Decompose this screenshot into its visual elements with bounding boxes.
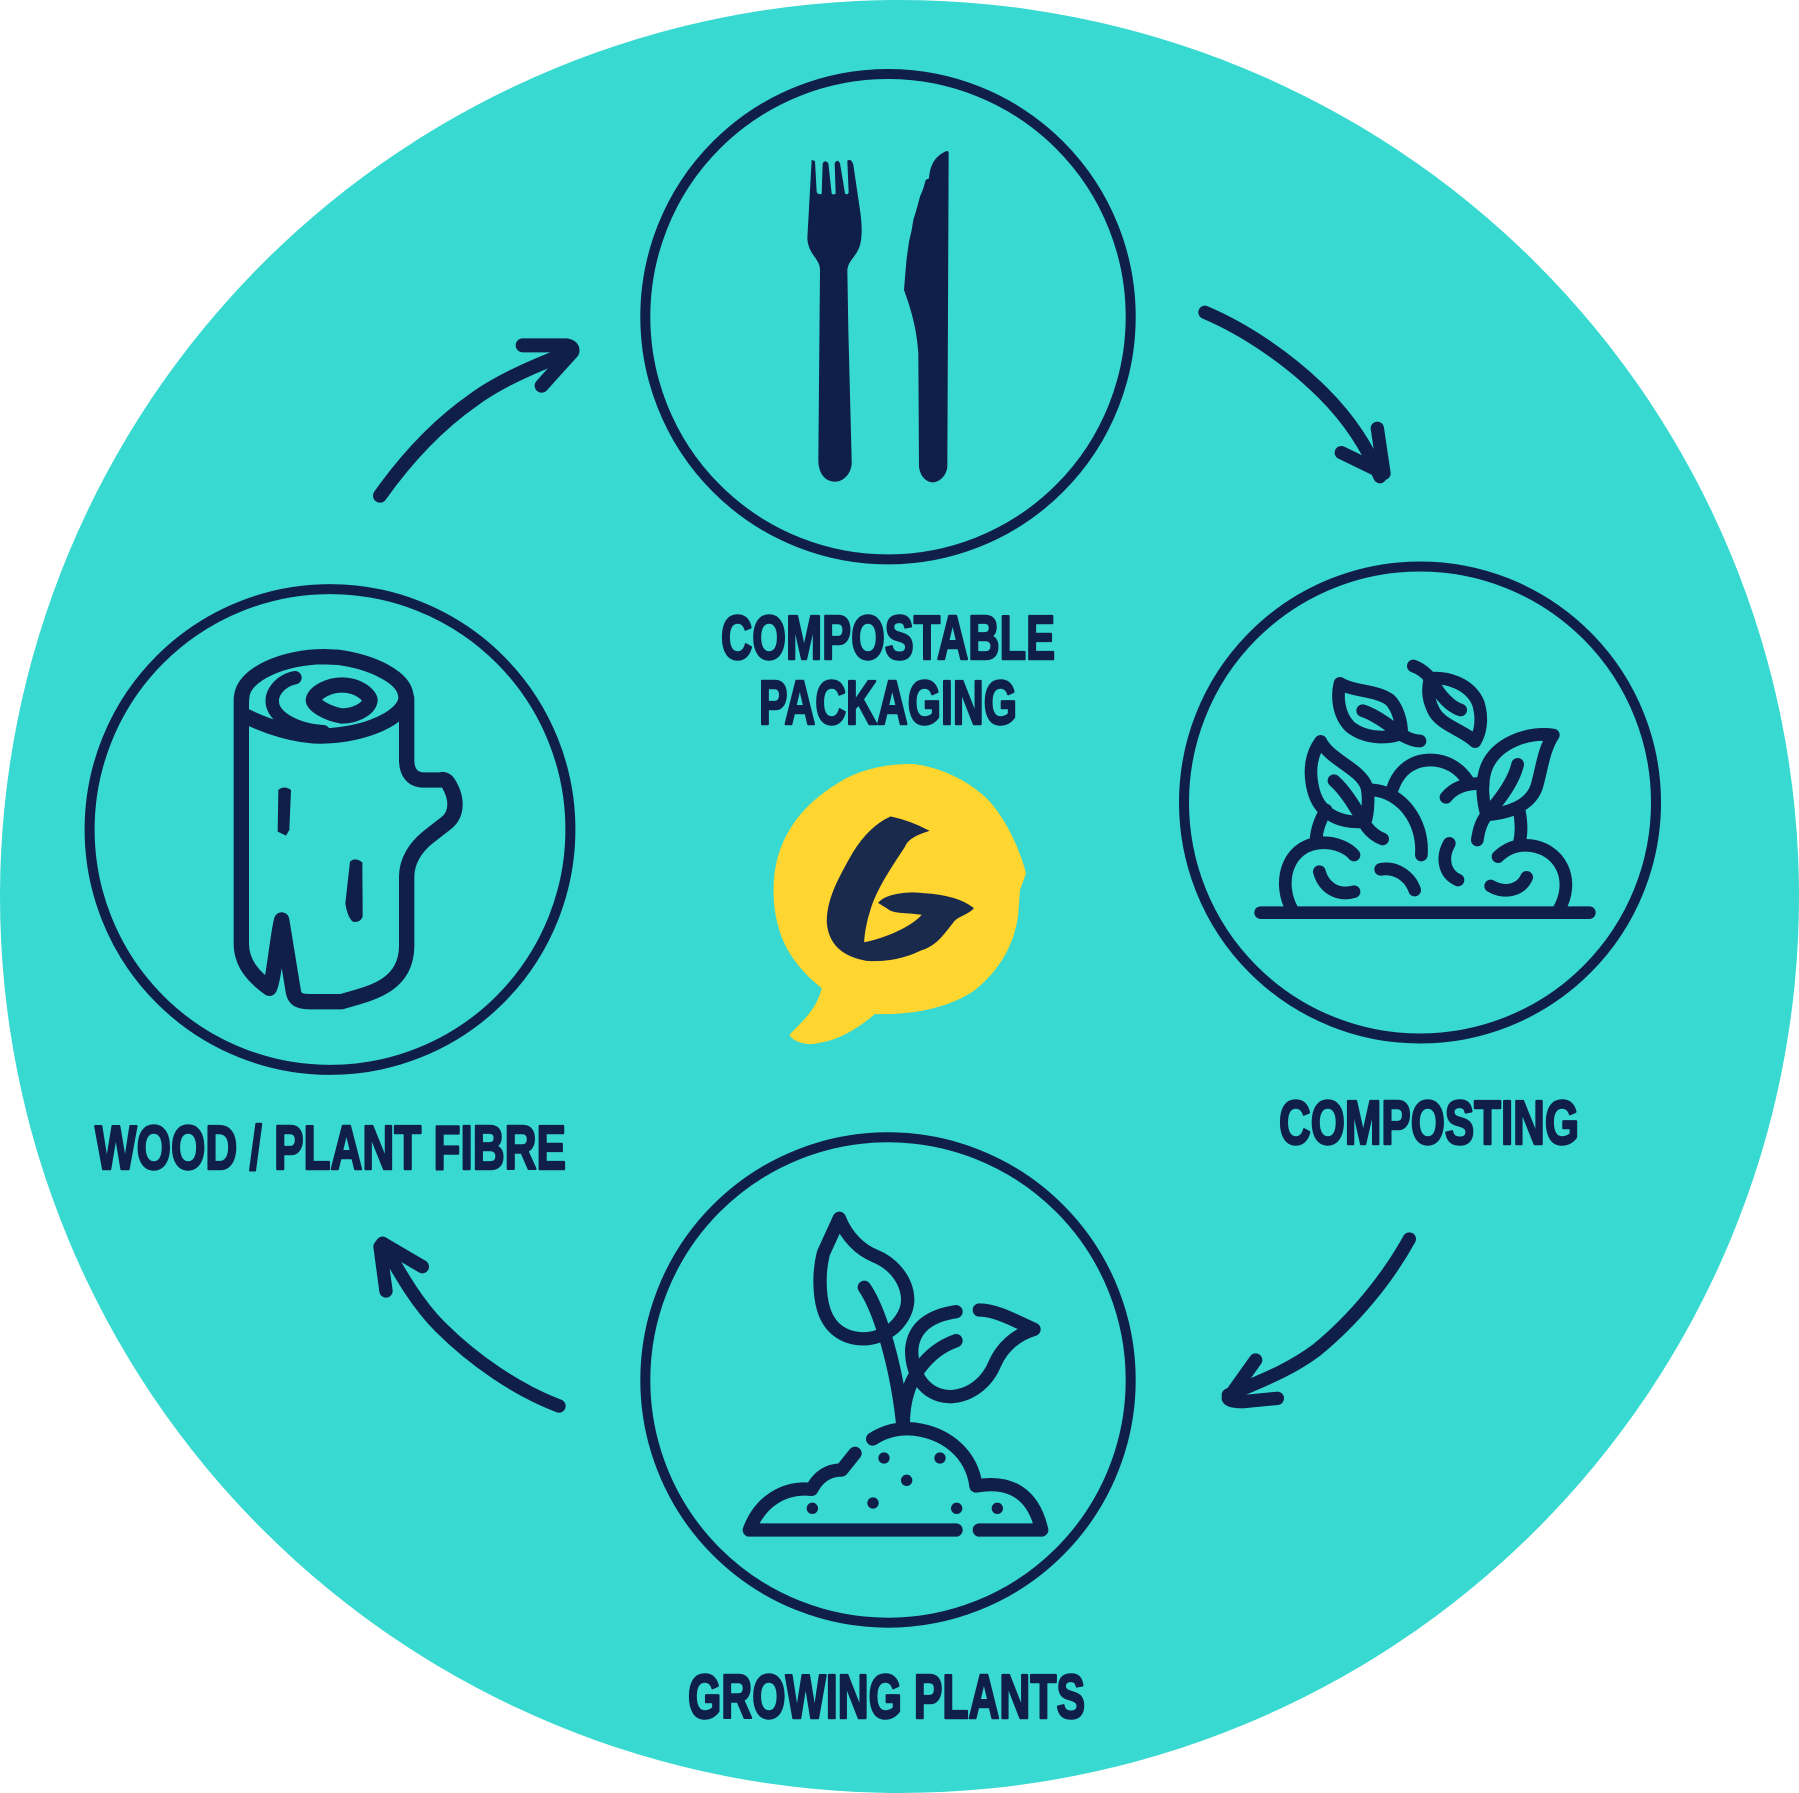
icon: compost heap with leaves [1261, 666, 1589, 913]
label: composting: COMPOSTING [1279, 1089, 1579, 1158]
panel: compostable packaging [645, 74, 1131, 738]
label: compostable packaging: COMPOSTABLE [721, 604, 1055, 673]
logo: yellow speech bubble with G [774, 764, 1026, 1044]
label: growing plants: GROWING PLANTS [688, 1663, 1085, 1732]
arrow: wood to packaging [380, 345, 572, 496]
label: compostable packaging [721, 604, 1055, 738]
panel: composting [1184, 566, 1656, 1158]
icon: fork and knife [807, 151, 949, 482]
label: wood / plant fibre: WOOD / PLANT FIBRE [95, 1114, 566, 1183]
icon: log [241, 657, 455, 1002]
arrow: composting to plants [1228, 1239, 1409, 1402]
panel: growing plants [645, 1137, 1131, 1732]
panel: wood / plant fibre [90, 589, 570, 1183]
icon: sprout in soil [749, 1218, 1042, 1530]
arrow: packaging to composting [1205, 312, 1384, 477]
arrow: plants to wood [380, 1243, 559, 1406]
label: compostable packaging: PACKAGING [759, 669, 1017, 738]
